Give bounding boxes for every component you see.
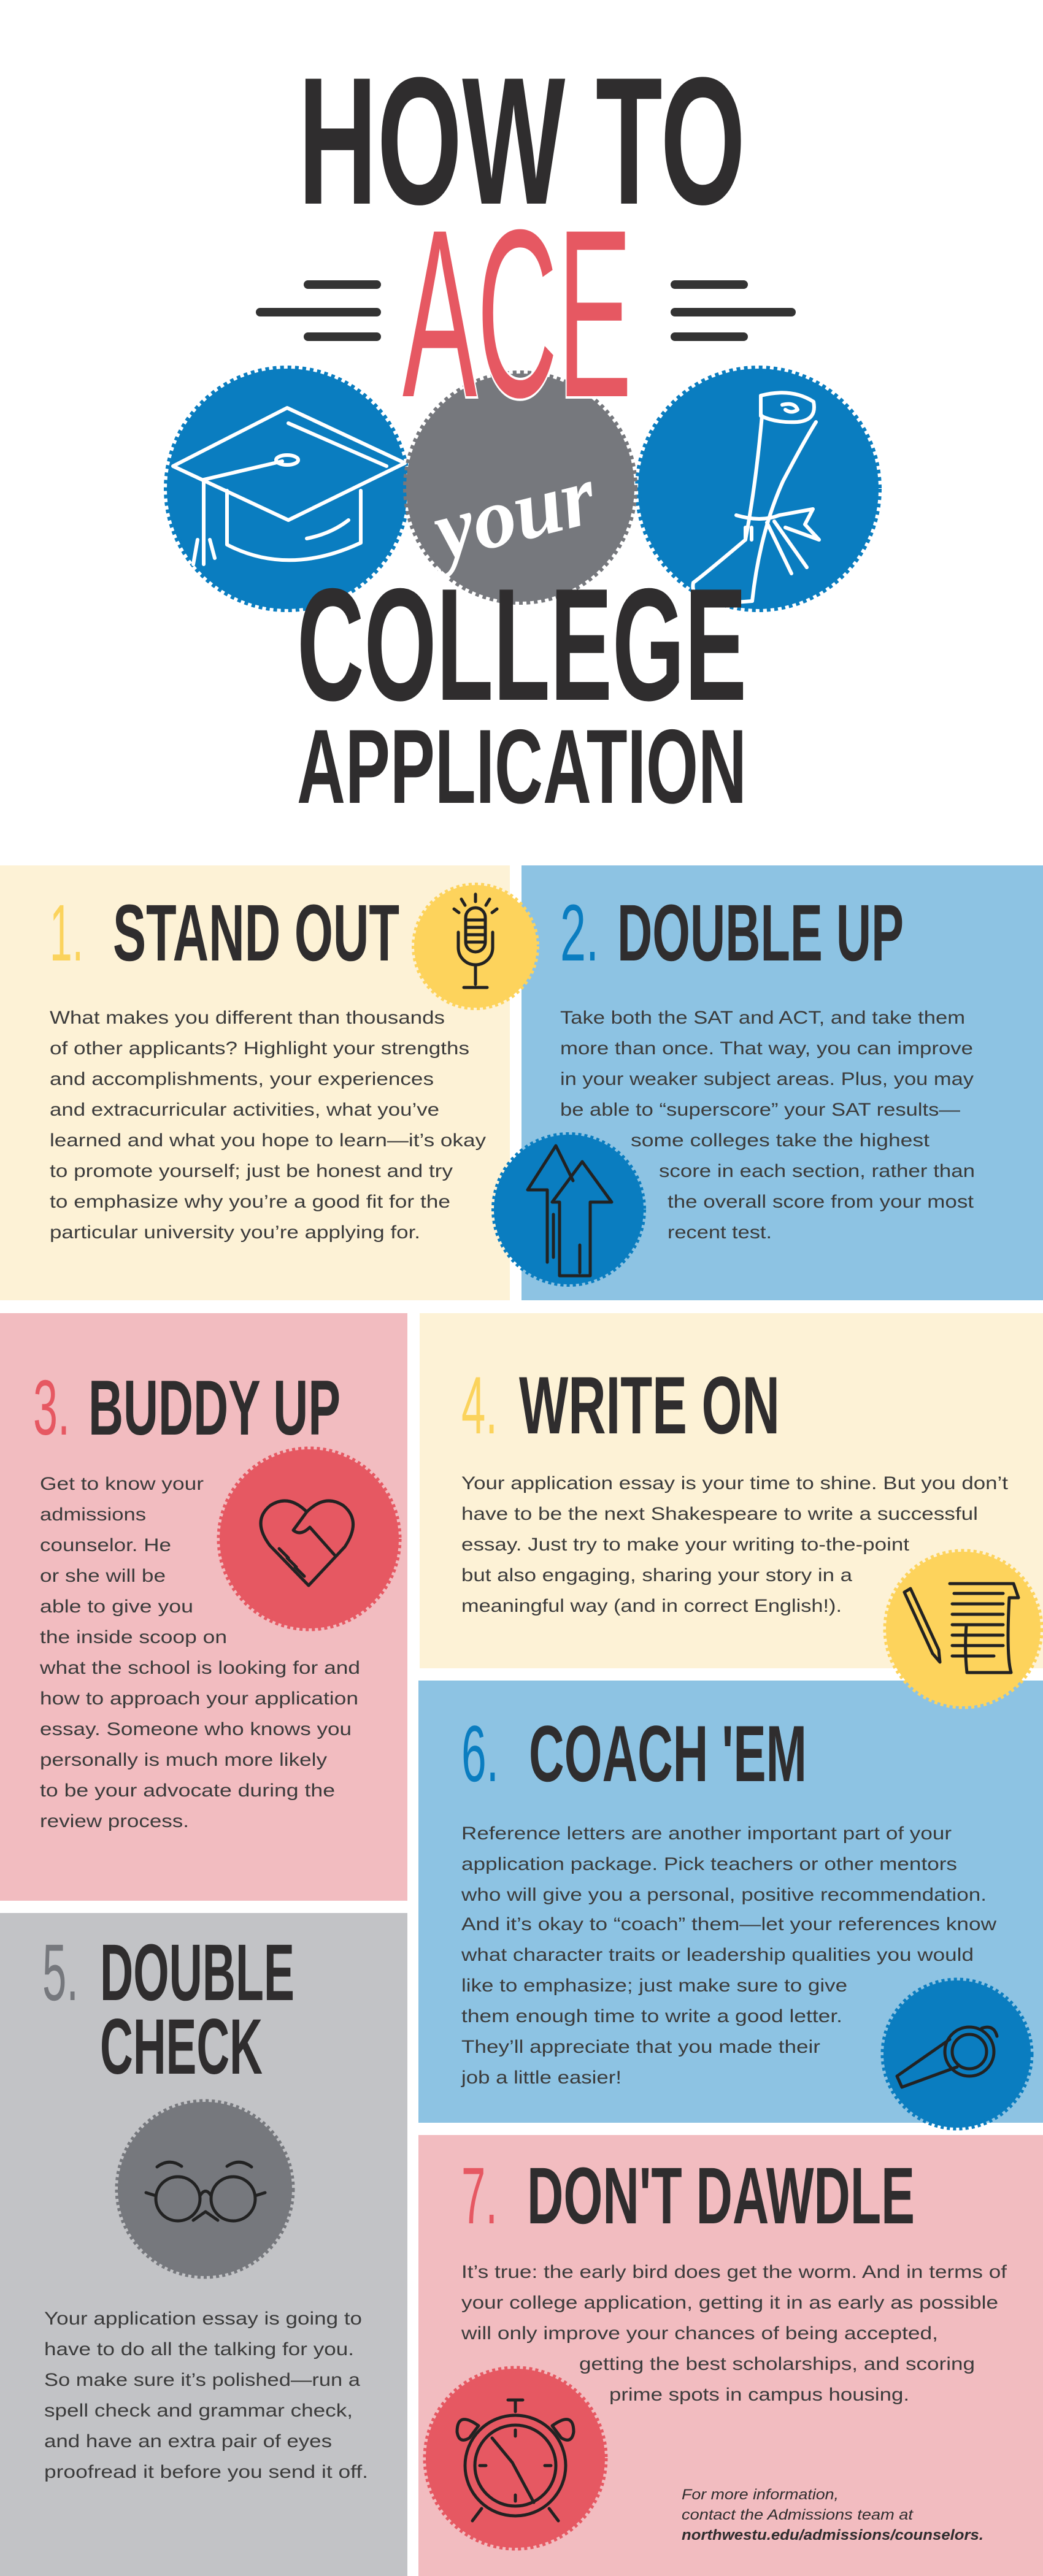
heading 7 — [461, 2150, 915, 2241]
body 1: particular university you’re applying for. — [50, 1222, 420, 1243]
body 6: what character traits or leadership qualities you would — [461, 1945, 974, 1965]
body 2: Take both the SAT and ACT, and take them — [560, 1008, 965, 1028]
badge: glasses — [118, 2102, 292, 2276]
body 1: and accomplishments, your experiences — [50, 1069, 434, 1089]
body 7: getting the best scholarships, and scoring — [579, 2354, 975, 2374]
body 5: spell check and grammar check, — [44, 2401, 353, 2421]
heading 6: 6. — [461, 1709, 499, 1798]
body 1: What makes you different than thousands — [50, 1008, 445, 1028]
body 1 — [50, 1008, 486, 1243]
body 6: They’ll appreciate that you made their — [461, 2037, 820, 2057]
icon: glasses face — [146, 2162, 265, 2221]
badge: microphone — [414, 885, 537, 1008]
badge: whistle — [883, 1980, 1031, 2128]
body 1: to emphasize why you’re a good fit for the — [50, 1192, 450, 1212]
body 5 — [44, 2309, 368, 2482]
body 3: what the school is looking for and — [39, 1658, 360, 1678]
body 6: application package. Pick teachers or other mentors — [461, 1854, 957, 1874]
body 7: will only improve your chances of being accepted, — [461, 2323, 938, 2344]
body 3: the inside scoop on — [40, 1627, 227, 1647]
body 5: have to do all the talking for you. — [44, 2339, 354, 2359]
body 3: review process. — [40, 1811, 189, 1831]
body 4: but also engaging, sharing your story in a — [461, 1565, 852, 1585]
heading 2 — [560, 887, 904, 978]
body 6: And it’s okay to “coach” them—let your references know — [461, 1914, 996, 1934]
body 4: have to be the next Shakespeare to write a successful — [461, 1504, 978, 1524]
body 6: like to emphasize; just make sure to give — [461, 1976, 847, 1996]
footer: contact info: For more information, — [682, 2486, 839, 2503]
panel: 6 coach em — [418, 1681, 1043, 2123]
body 4: essay. Just try to make your writing to-the-point — [461, 1535, 910, 1555]
heading 4 — [461, 1360, 780, 1451]
body 6: them enough time to write a good letter. — [461, 2006, 842, 2026]
heading 5: CHECK — [100, 2003, 263, 2091]
body 6: who will give you a personal, positive recommendation. — [461, 1885, 987, 1905]
body 2: in your weaker subject areas. Plus, you may — [560, 1069, 974, 1089]
body 1: and extracurricular activities, what you’ve — [50, 1100, 439, 1120]
body 5: So make sure it’s polished—run a — [44, 2370, 360, 2390]
icon: diploma scroll — [693, 393, 819, 604]
heading 1 — [50, 887, 399, 978]
body 6 — [461, 1823, 996, 2088]
body 3: counselor. He — [40, 1535, 171, 1555]
heading 4: WRITE ON — [519, 1360, 780, 1451]
body 7: prime spots in campus housing. — [609, 2385, 909, 2405]
body 4: Your application essay is your time to shine. But you don’t — [461, 1473, 1009, 1493]
body 2: the overall score from your most — [668, 1192, 974, 1212]
heading 3 — [33, 1364, 341, 1451]
body 3: how to approach your application — [40, 1689, 358, 1709]
body 5: proofread it before you send it off. — [44, 2462, 368, 2482]
body 3: admissions — [40, 1505, 146, 1525]
body 1: of other applicants? Highlight your strengths — [50, 1038, 469, 1059]
title: APPLICATION: APPLICATION — [297, 708, 747, 826]
panel: 7 don't dawdle — [418, 2135, 1043, 2576]
icon: graduation cap — [173, 408, 405, 564]
body 2: score in each section, rather than — [659, 1161, 975, 1181]
body 7: It’s true: the early bird does get the worm. And in terms of — [461, 2262, 1007, 2282]
heading 3: BUDDY UP — [88, 1364, 341, 1451]
body 5: and have an extra pair of eyes — [44, 2431, 332, 2451]
body 2: some colleges take the highest — [631, 1130, 930, 1151]
script word: your: your — [415, 447, 606, 581]
icon: handshake heart — [261, 1501, 353, 1585]
heading 7: 7. — [461, 2150, 498, 2241]
heading 1: 1. — [50, 887, 83, 978]
body 3: able to give you — [40, 1597, 193, 1617]
body 6: Reference letters are another important part of your — [461, 1823, 952, 1844]
badge: your — [406, 374, 634, 602]
body 3: to be your advocate during the — [40, 1781, 335, 1801]
heading 3: 3. — [33, 1364, 70, 1451]
body 3: or she will be — [40, 1566, 166, 1586]
title decoration lines — [260, 285, 791, 337]
panel: 4 write on — [420, 1313, 1043, 1668]
panel: 1 stand out — [0, 865, 510, 1300]
heading 5 — [42, 1927, 294, 2091]
heading 6: COACH 'EM — [529, 1709, 807, 1798]
body 3: personally is much more likely — [40, 1750, 327, 1770]
body 4: meaningful way (and in correct English!). — [461, 1596, 842, 1616]
badge: diploma — [638, 369, 879, 609]
title: HOW TO: HOW TO — [298, 39, 745, 242]
badge: alarm clock — [426, 2369, 605, 2548]
badge: handshake heart — [220, 1449, 399, 1628]
footer: contact info: northwestu.edu/admissions/counselors. — [682, 2527, 983, 2543]
icon: microphone — [454, 894, 497, 987]
panel: 5 double check — [0, 1913, 407, 2576]
text: ACE — [402, 180, 632, 447]
icon: whistle — [897, 2027, 997, 2087]
badge: paper and pencil — [886, 1552, 1041, 1706]
badge: arrows — [494, 1135, 644, 1284]
heading 6 — [461, 1709, 807, 1798]
badge: graduation cap — [167, 369, 407, 609]
body 3 — [39, 1474, 360, 1831]
icon: alarm clock — [457, 2400, 574, 2521]
icon: paper and pencil — [904, 1584, 1018, 1673]
heading 5: DOUBLE — [100, 1927, 294, 2017]
body 3: Get to know your — [40, 1474, 204, 1494]
body 1: learned and what you hope to learn—it’s okay — [50, 1130, 486, 1151]
footer: contact info: contact the Admissions team at — [682, 2507, 914, 2523]
body 4 — [461, 1473, 1009, 1616]
body 7 — [461, 2262, 1007, 2405]
heading 4: 4. — [461, 1360, 498, 1451]
body 2: recent test. — [668, 1222, 772, 1243]
body 2 — [560, 1008, 975, 1243]
body 6: job a little easier! — [461, 2068, 622, 2088]
icon: up arrows — [528, 1146, 612, 1276]
heading 5: 5. — [42, 1927, 79, 2017]
body 3: essay. Someone who knows you — [40, 1719, 352, 1739]
body 7: your college application, getting it in as early as possible — [461, 2293, 998, 2313]
heading 2: 2. — [560, 887, 599, 978]
footer: contact info — [682, 2486, 983, 2543]
body 5: Your application essay is going to — [44, 2309, 362, 2329]
heading 1: STAND OUT — [113, 887, 399, 978]
body 2: be able to “superscore” your SAT results— — [560, 1100, 960, 1120]
panel: 2 double up — [522, 865, 1043, 1300]
body 1: to promote yourself; just be honest and try — [50, 1161, 453, 1181]
panel: 3 buddy up — [0, 1313, 407, 1901]
body 2: more than once. That way, you can improve — [560, 1038, 973, 1059]
